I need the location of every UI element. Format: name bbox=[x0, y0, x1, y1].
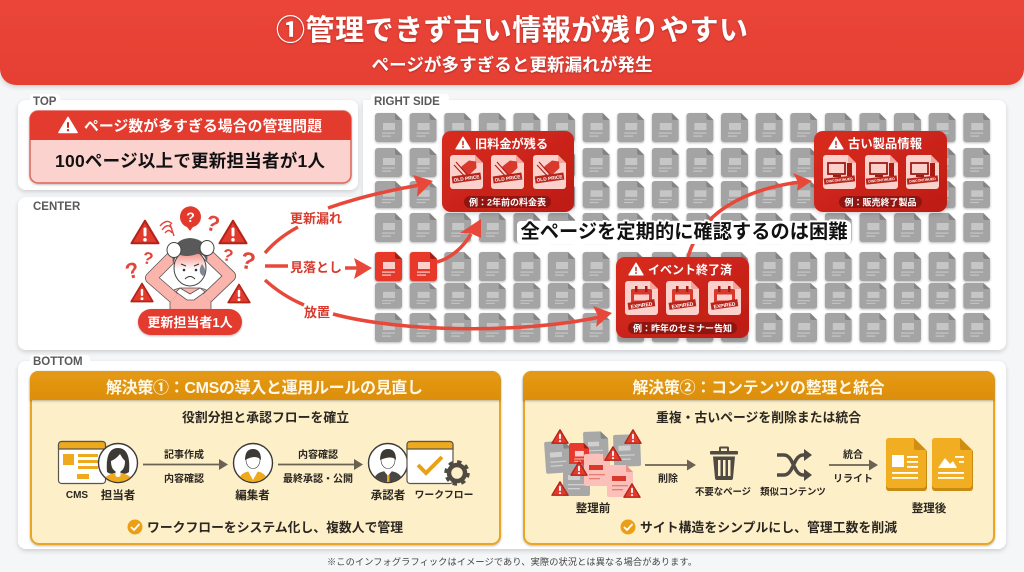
icon: warning bbox=[829, 137, 843, 149]
solution subheading: 役割分担と承認フローを確立 bbox=[182, 410, 349, 425]
icon: expired page: EXPIRED bbox=[671, 301, 694, 310]
icon: old price page: OLD PRICE bbox=[536, 174, 564, 184]
panel: solution 2 bbox=[523, 371, 994, 544]
panel: solution 1 bbox=[30, 371, 500, 544]
label: approver: 承認者 bbox=[371, 488, 405, 502]
icon: messy page pile bbox=[544, 430, 641, 497]
icon: check bbox=[128, 520, 142, 534]
section label: top: TOP bbox=[33, 96, 57, 108]
callout: old pricing bbox=[442, 131, 574, 212]
icon: warning bbox=[629, 263, 643, 275]
icon: warning triangles bbox=[131, 221, 250, 302]
arrow: overlooked bbox=[265, 258, 372, 279]
icon: person in charge bbox=[98, 442, 138, 484]
label: delete: 削除 bbox=[658, 472, 678, 485]
panel: bottom bbox=[18, 361, 1006, 549]
icon: old price page: OLD PRICE bbox=[453, 174, 481, 184]
icon: expired page: EXPIRED bbox=[630, 301, 653, 310]
label: article: 記事作成 bbox=[164, 448, 204, 461]
icon: discontinued page: DISCONTINUED bbox=[826, 177, 853, 184]
central message: 全ページを定期的に確認するのは困難 bbox=[520, 221, 848, 243]
question marks: ? bbox=[203, 210, 223, 237]
icon: organised image document bbox=[932, 438, 973, 491]
label: similar content: 類似コンテンツ bbox=[760, 486, 826, 497]
label: before: 整理前 bbox=[576, 501, 610, 515]
label: unneeded pages: 不要なページ bbox=[695, 486, 751, 497]
icon: trash bbox=[710, 446, 738, 480]
highlighted red pages bbox=[375, 252, 437, 281]
arrow: red pages to old pricing bbox=[437, 219, 481, 262]
arrow label: 放置 bbox=[304, 305, 330, 320]
icon: warning bbox=[456, 137, 470, 149]
section label: bottom: BOTTOM bbox=[33, 356, 83, 368]
icon: old price page: OLD PRICE bbox=[494, 174, 522, 184]
header banner bbox=[0, 0, 1024, 85]
question marks: ? bbox=[238, 247, 258, 276]
arrow: delete bbox=[645, 460, 696, 470]
badge: person label: 更新担当者1人 bbox=[147, 315, 233, 330]
label: merge: 統合 bbox=[843, 448, 863, 461]
icon: shuffle bbox=[777, 449, 812, 481]
callout heading: 古い製品情報 bbox=[848, 136, 923, 151]
label: editor: 編集者 bbox=[235, 488, 270, 502]
icon: check bbox=[620, 520, 636, 534]
icon: swirl bbox=[160, 221, 174, 236]
callout heading: イベント終了済 bbox=[648, 262, 732, 277]
arrow: to approver bbox=[278, 459, 363, 470]
label: rewrite: リライト bbox=[833, 473, 873, 485]
question marks: ? bbox=[122, 257, 142, 284]
icon: discontinued page: DISCONTINUED bbox=[909, 177, 936, 184]
panel: center and right side bbox=[18, 100, 1006, 350]
example pill: 例：昨年のセミナー告知 bbox=[633, 322, 732, 334]
panel: top bbox=[18, 94, 358, 190]
solution heading: 解決策①：CMSの導入と運用ルールの見直し bbox=[106, 378, 423, 397]
section label: right side: RIGHT SIDE bbox=[374, 96, 440, 108]
icon: discontinued page: DISCONTINUED bbox=[868, 177, 895, 184]
icon: workflow window bbox=[407, 442, 453, 484]
card text: 100ページ以上で更新担当者が1人 bbox=[55, 151, 326, 171]
problem card bbox=[30, 111, 351, 183]
icon: gear bbox=[446, 462, 468, 484]
arrow label: 見落とし bbox=[290, 260, 342, 275]
icon: expired page: EXPIRED bbox=[713, 301, 736, 310]
callout: event ended bbox=[616, 257, 749, 338]
label: review: 内容確認 bbox=[298, 448, 338, 461]
icon: approver bbox=[368, 444, 408, 486]
solution subheading: 重複・古いページを削除または統合 bbox=[656, 410, 861, 425]
page grid bbox=[375, 113, 990, 342]
solution conclusion: サイト構造をシンプルにし、管理工数を削減 bbox=[640, 520, 897, 535]
callout heading: 旧料金が残る bbox=[475, 136, 548, 151]
example pill: 例：販売終了製品 bbox=[844, 196, 917, 208]
label: CMS: CMS bbox=[66, 490, 88, 501]
arrow: event to old products bbox=[688, 173, 812, 257]
illustration: worried person bbox=[122, 206, 258, 335]
arrow: to editor bbox=[143, 459, 228, 470]
question marks: ? bbox=[141, 248, 155, 269]
arrow: merge bbox=[829, 460, 878, 470]
icon: editor bbox=[234, 444, 272, 486]
subtitle: ページが多すぎると更新漏れが発生 bbox=[372, 55, 652, 75]
example pill: 例：2年前の料金表 bbox=[469, 196, 546, 208]
arrow: neglected bbox=[265, 280, 612, 329]
arrow label: 更新漏れ bbox=[290, 211, 342, 226]
footnote: ※このインフォグラフィックはイメージであり、実際の状況とは異なる場合があります。 bbox=[327, 556, 697, 567]
body bbox=[170, 288, 211, 312]
solution heading: 解決策②：コンテンツの整理と統合 bbox=[632, 378, 885, 397]
label: workflow: ワークフロー bbox=[415, 489, 473, 501]
label: person in charge: 担当者 bbox=[101, 488, 135, 502]
icon: warning bbox=[59, 118, 77, 132]
question marks bbox=[122, 210, 258, 284]
card heading: ページ数が多すぎる場合の管理問題 bbox=[84, 117, 322, 135]
icon: organised document bbox=[886, 438, 927, 491]
icon: question bubble: ? bbox=[186, 209, 195, 225]
question marks: ? bbox=[221, 245, 235, 266]
label: final approval: 最終承認・公開 bbox=[283, 472, 353, 485]
section label: center: CENTER bbox=[33, 201, 81, 213]
label: review: 内容確認 bbox=[164, 472, 204, 485]
label: after: 整理後 bbox=[912, 501, 947, 515]
callout: old products bbox=[814, 131, 947, 212]
solution conclusion: ワークフローをシステム化し、複数人で管理 bbox=[147, 520, 403, 535]
arrow: update omission bbox=[265, 175, 433, 253]
title: ①管理できず古い情報が残りやすい bbox=[276, 13, 748, 47]
icon: CMS window bbox=[58, 442, 106, 484]
